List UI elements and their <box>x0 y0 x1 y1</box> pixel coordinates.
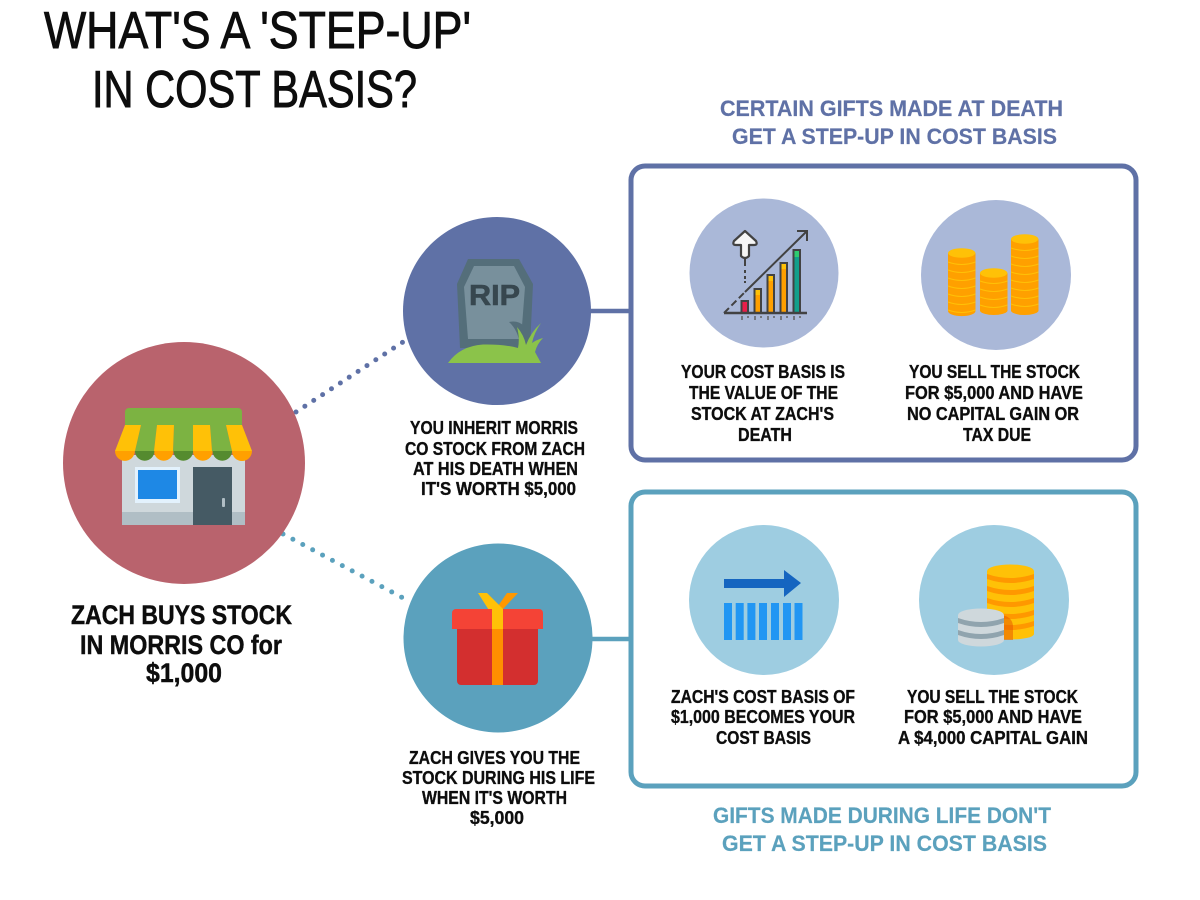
text: Zach buys stock: $1,000 <box>146 658 222 688</box>
title: IN COST BASIS? <box>92 60 417 118</box>
text: Zach's cost basis becomes yours: COST BASIS <box>716 727 811 748</box>
text: you sell, no gain: TAX DUE <box>963 424 1031 445</box>
text: Zach buys stock: IN MORRIS CO for <box>80 630 282 660</box>
heading: gifts made during life: GIFTS MADE DURING LIFE DON'T <box>713 803 1051 828</box>
dotted connector: store to inherit <box>296 342 403 412</box>
text: your cost basis: STOCK AT ZACH'S <box>691 403 834 424</box>
icon: gift in circle <box>404 544 592 732</box>
text: Zach's cost basis becomes yours: $1,000 BECOMES YOUR <box>671 706 855 727</box>
text: your cost basis: YOUR COST BASIS IS <box>681 361 845 382</box>
text: you sell, capital gain: A $4,000 CAPITAL GAIN <box>898 727 1088 748</box>
heading: certain gifts made at death: GET A STEP-UP IN COST BASIS <box>732 124 1057 149</box>
text: you sell, capital gain: FOR $5,000 AND HAVE <box>904 706 1082 727</box>
panel: gift during life <box>631 492 1136 786</box>
icon: three coin stacks in circle <box>921 200 1071 350</box>
icon: gravestone in circle <box>403 217 591 405</box>
heading: certain gifts made at death: CERTAIN GIFTS MADE AT DEATH <box>720 96 1063 121</box>
dotted connector: store to gift <box>283 534 405 599</box>
title: WHAT'S A 'STEP-UP' <box>44 1 471 59</box>
text: you inherit: AT HIS DEATH WHEN <box>413 458 578 479</box>
connector: gift circle to bottom panel <box>590 637 631 641</box>
text: Zach's cost basis becomes yours <box>671 686 855 748</box>
icon: store in circle <box>63 342 305 584</box>
text: your cost basis: DEATH <box>738 424 792 445</box>
heading: gifts made during life <box>713 803 1051 856</box>
text: your cost basis <box>681 361 845 445</box>
text: Zach buys stock: ZACH BUYS STOCK <box>71 600 292 630</box>
text: Zach's cost basis becomes yours: ZACH'S COST BASIS OF <box>671 686 855 707</box>
text: you sell, no gain <box>905 361 1083 445</box>
text: Zach gives you: ZACH GIVES YOU THE <box>409 747 580 768</box>
text: you sell, no gain: NO CAPITAL GAIN OR <box>907 403 1079 424</box>
text: you sell, capital gain: YOU SELL THE STOCK <box>907 686 1079 707</box>
text: you sell, capital gain <box>898 686 1088 748</box>
icon: gold and silver coins in circle <box>919 525 1069 675</box>
text: your cost basis: THE VALUE OF THE <box>689 382 838 403</box>
text: you inherit: IT'S WORTH $5,000 <box>421 478 576 499</box>
title <box>44 1 471 118</box>
text: you inherit: CO STOCK FROM ZACH <box>405 438 585 459</box>
heading: certain gifts made at death <box>720 96 1063 149</box>
icon: carry-over arrow in circle <box>689 525 839 675</box>
text: Zach gives you: WHEN IT'S WORTH <box>422 787 567 808</box>
text: Zach buys stock <box>71 600 292 688</box>
text: you sell, no gain: FOR $5,000 AND HAVE <box>905 382 1083 403</box>
connector: inherit circle to top panel <box>590 309 631 313</box>
panel: step-up at death <box>631 166 1136 460</box>
text: you sell, no gain: YOU SELL THE STOCK <box>909 361 1081 382</box>
text: Zach gives you: $5,000 <box>470 807 524 828</box>
text: you inherit <box>405 417 585 499</box>
icon: rising chart in circle <box>690 198 838 348</box>
icon: gravestone in circle: RIP <box>469 280 520 312</box>
heading: gifts made during life: GET A STEP-UP IN COST BASIS <box>722 831 1047 856</box>
text: Zach gives you: STOCK DURING HIS LIFE <box>402 767 595 788</box>
text: Zach gives you <box>402 747 595 828</box>
text: you inherit: YOU INHERIT MORRIS <box>410 417 578 438</box>
